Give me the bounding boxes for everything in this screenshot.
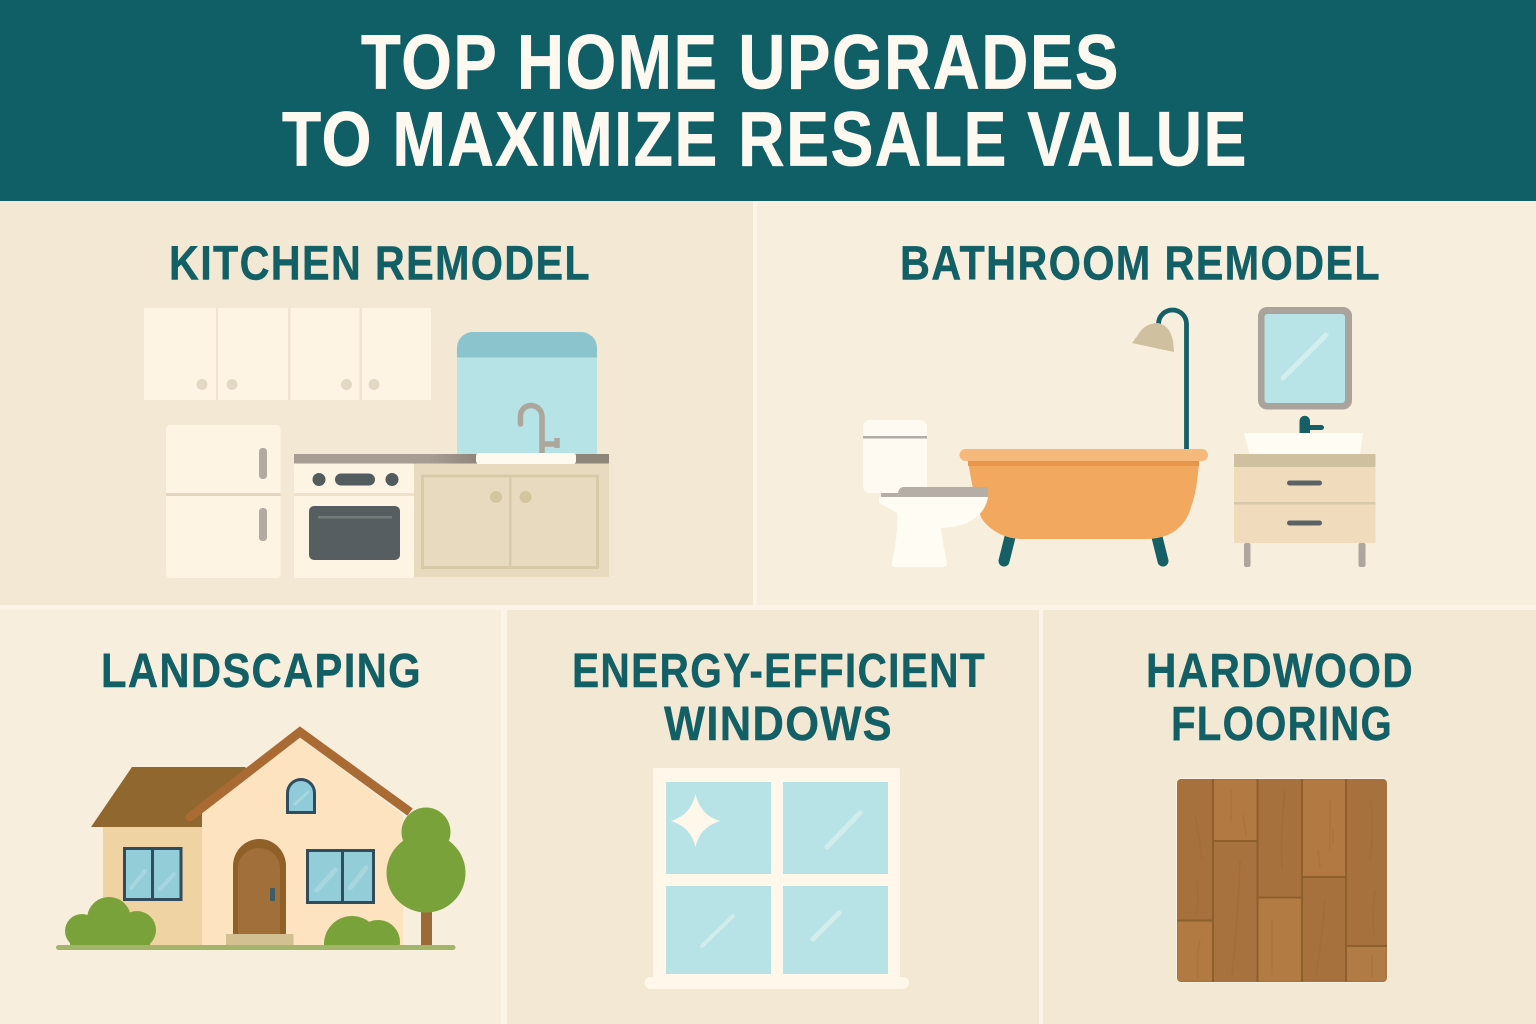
panel: landscaping bbox=[0, 610, 501, 1024]
house bbox=[91, 732, 410, 945]
shower pipe and head bbox=[1132, 310, 1186, 451]
kitchen window bbox=[457, 332, 597, 454]
faucet bbox=[520, 406, 557, 454]
panel: energy-efficient windows bbox=[507, 610, 1039, 1024]
heading: landscaping: LANDSCAPING bbox=[101, 645, 422, 698]
upper cabinets bbox=[144, 308, 431, 400]
header banner bbox=[0, 0, 1536, 201]
refrigerator bbox=[166, 425, 280, 578]
sparkle bbox=[671, 794, 720, 847]
heading: bathroom remodel: BATHROOM REMODEL bbox=[900, 238, 1381, 290]
heading: energy-efficient windows: WINDOWS bbox=[664, 698, 893, 751]
left window bbox=[123, 847, 182, 901]
countertop and sink bbox=[294, 453, 609, 464]
title line 1: TOP HOME UPGRADES bbox=[361, 20, 1120, 106]
wood floor planks bbox=[1176, 778, 1388, 983]
door step bbox=[226, 934, 294, 945]
heading: hardwood flooring bbox=[1146, 645, 1414, 751]
heading: kitchen remodel: KITCHEN REMODEL bbox=[169, 238, 591, 290]
bathtub bbox=[960, 449, 1208, 561]
panel: hardwood flooring bbox=[1043, 610, 1536, 1024]
lower cabinet bbox=[414, 463, 609, 577]
left bush bbox=[65, 897, 156, 949]
right bush bbox=[324, 916, 400, 945]
attic window bbox=[286, 778, 316, 814]
vanity cabinet bbox=[1234, 454, 1376, 567]
heading: hardwood flooring: FLOORING bbox=[1171, 698, 1393, 751]
window illustration bbox=[644, 768, 909, 989]
mirror bbox=[1258, 307, 1352, 410]
front door bbox=[233, 839, 286, 934]
title line 2: TO MAXIMIZE RESALE VALUE bbox=[282, 96, 1248, 182]
heading: hardwood flooring: HARDWOOD bbox=[1146, 645, 1414, 698]
toilet bbox=[863, 420, 988, 567]
panel: bathroom remodel bbox=[757, 201, 1536, 605]
heading: energy-efficient windows bbox=[572, 645, 986, 751]
right window bbox=[306, 849, 375, 904]
vanity sink and faucet bbox=[1244, 416, 1363, 454]
tree bbox=[386, 808, 466, 946]
panel: kitchen remodel bbox=[0, 201, 753, 605]
ground line bbox=[56, 945, 456, 950]
heading: energy-efficient windows: ENERGY-EFFICIENT bbox=[572, 645, 986, 698]
stove and oven bbox=[294, 463, 414, 578]
